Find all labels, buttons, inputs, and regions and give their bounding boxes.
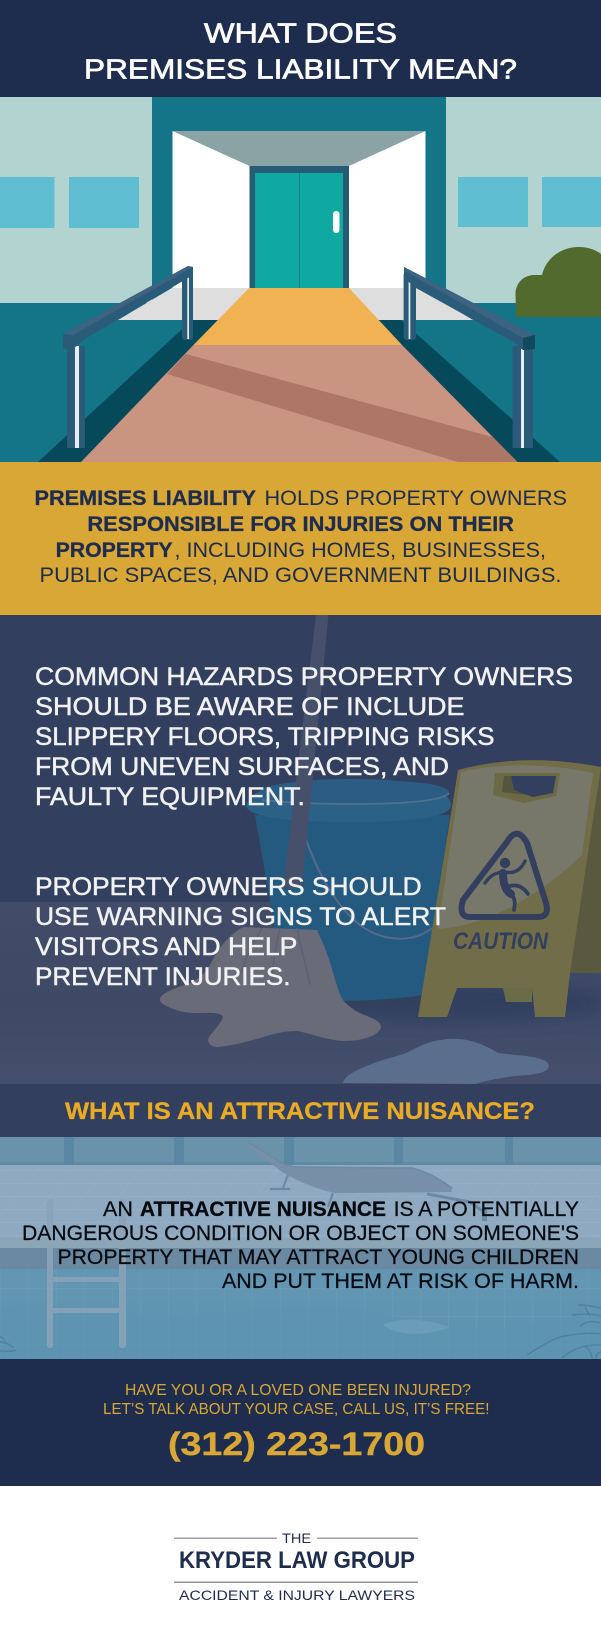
intro text: RESPONSIBLE FOR INJURIES ON THEIR: [87, 512, 514, 536]
nuisance text: DANGEROUS CONDITION OR OBJECT ON SOMEONE'S: [22, 1221, 579, 1245]
logo: THE: [282, 1530, 311, 1546]
pool scene panel: [0, 1137, 601, 1359]
deck: [0, 1165, 601, 1238]
hazards text: FAULTY EQUIPMENT.: [35, 783, 305, 811]
water: [0, 1269, 601, 1359]
attractive nuisance heading: WHAT IS AN ATTRACTIVE NUISANCE?: [65, 1098, 535, 1125]
intro text: HOLDS PROPERTY OWNERS: [264, 486, 567, 510]
hazards text: USE WARNING SIGNS TO ALERT: [35, 903, 446, 931]
hazards text: PROPERTY OWNERS SHOULD: [35, 873, 422, 901]
floor: [0, 902, 601, 1084]
landing: [118, 288, 473, 320]
nuisance text: AN: [103, 1197, 133, 1221]
hazards text: PREVENT INJURIES.: [35, 963, 290, 991]
intro band: [0, 462, 601, 615]
sign handle: [493, 773, 560, 803]
left handrail: [63, 266, 193, 448]
hazards text: VISITORS AND HELP: [35, 933, 297, 961]
seaweed: [0, 1305, 601, 1359]
call to action footer: [0, 1359, 601, 1486]
logo: KRYDER LAW GROUP: [179, 1547, 415, 1574]
mop strands: [240, 928, 310, 985]
mop handle: [283, 615, 328, 888]
puddle: [343, 1039, 549, 1084]
intro text: , INCLUDING HOMES, BUSINESSES,: [174, 538, 546, 562]
title text: WHAT DOES: [204, 18, 397, 48]
doorway: [172, 131, 426, 288]
intro text: PUBLIC SPACES, AND GOVERNMENT BUILDINGS.: [40, 563, 562, 587]
ramp shadow: [167, 354, 518, 462]
nuisance text: ATTRACTIVE NUISANCE: [140, 1197, 386, 1221]
sign highlight: [438, 765, 593, 929]
hazards text: [35, 663, 573, 991]
nuisance text: AND PUT THEM AT RISK OF HARM.: [222, 1269, 579, 1293]
caution label: CAUTION: [453, 928, 549, 955]
windows: [0, 177, 601, 228]
call to action text: HAVE YOU OR A LOVED ONE BEEN INJURED?: [125, 1382, 471, 1399]
attractive nuisance heading: [0, 1084, 601, 1137]
warning triangle icon: [462, 834, 547, 917]
title banner: [0, 0, 601, 97]
pool ladder: [47, 1199, 126, 1348]
right handrail: [404, 267, 535, 448]
hazards text: SHOULD BE AWARE OF INCLUDE: [35, 693, 464, 721]
pink ramp section: [81, 345, 518, 462]
title text: [84, 18, 517, 84]
slipping figure: [485, 858, 528, 910]
lounge chair: [245, 1142, 487, 1221]
caution sign: [418, 760, 601, 1017]
nuisance text: IS A POTENTIALLY: [394, 1197, 579, 1221]
mop head: [160, 927, 381, 1047]
nuisance text: [22, 1197, 579, 1293]
logo: [174, 1530, 418, 1603]
hazards text: COMMON HAZARDS PROPERTY OWNERS: [35, 663, 573, 691]
wall right: [446, 97, 601, 303]
fence: [0, 1137, 601, 1167]
intro text: [34, 486, 567, 587]
door: [250, 166, 349, 288]
bush: [516, 247, 601, 317]
hazards text: FROM UNEVEN SURFACES, AND: [35, 753, 449, 781]
phone number: (312) 223-1700: [168, 1426, 425, 1462]
bucket: [246, 779, 451, 1001]
nuisance text: PROPERTY THAT MAY ATTRACT YOUNG CHILDREN: [58, 1245, 579, 1269]
floor shadow: [310, 982, 601, 1022]
hero illustration: building entrance with ramp: [0, 97, 601, 462]
intro text: PREMISES LIABILITY: [34, 486, 256, 510]
logo: ACCIDENT & INJURY LAWYERS: [179, 1587, 415, 1603]
yellow ramp section: [194, 288, 402, 345]
intro text: PROPERTY: [56, 538, 173, 562]
wall left: [0, 97, 152, 303]
doorway ceiling: [172, 131, 426, 166]
hazards text: SLIPPERY FLOORS, TRIPPING RISKS: [35, 723, 495, 751]
water highlight: [383, 1320, 450, 1334]
pool edge: [0, 1238, 601, 1248]
hazards panel: [0, 615, 601, 1084]
ramp edge: [38, 320, 560, 462]
title text: PREMISES LIABILITY MEAN?: [84, 54, 517, 84]
call to action text: LET’S TALK ABOUT YOUR CASE, CALL US, IT’S FREE!: [103, 1401, 490, 1418]
call to action text: [103, 1382, 490, 1418]
